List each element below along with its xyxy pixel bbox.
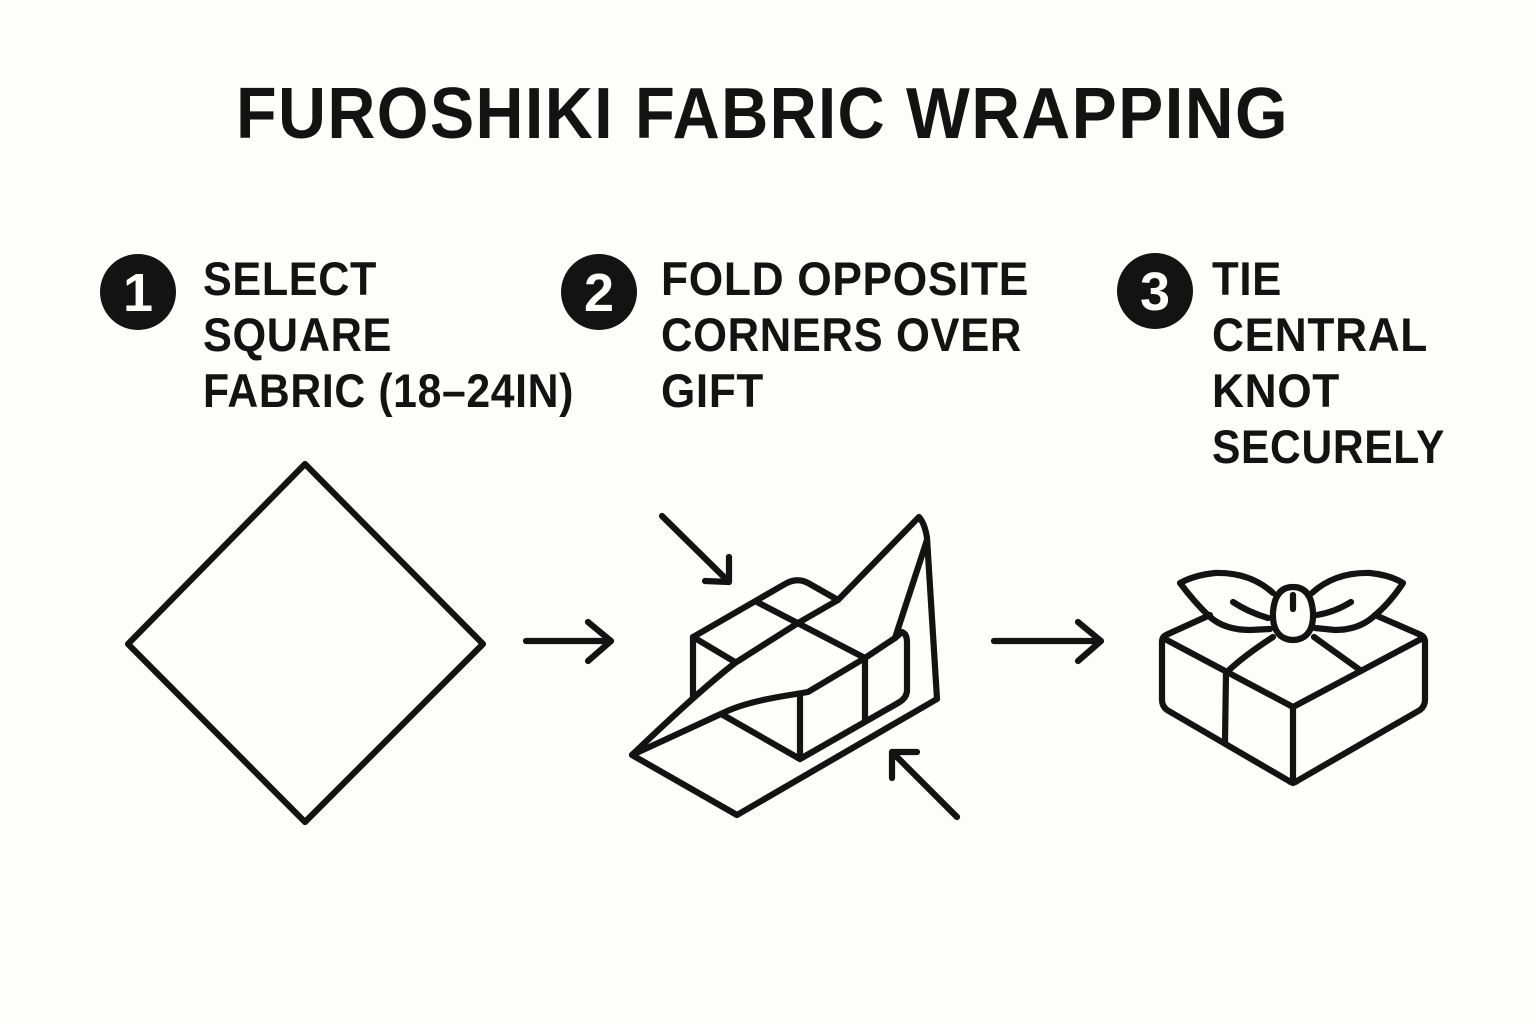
step 3 number badge: 3 [1140, 262, 1170, 322]
step 3 heading [1117, 252, 1445, 473]
arrow: step 1 to step 2 [526, 622, 611, 661]
step 3 number badge [1117, 253, 1193, 329]
step 3 text: TIE [1212, 252, 1282, 305]
title [236, 73, 1289, 154]
step 2 heading [561, 252, 1029, 417]
step 1 text: FABRIC (18–24IN) [203, 364, 574, 417]
step 2 text: CORNERS OVER [661, 308, 1022, 361]
step 1 heading [100, 252, 574, 417]
title: WRAPPING [906, 73, 1289, 154]
icon: square fabric diamond [128, 464, 483, 822]
step 2 text [661, 252, 1029, 417]
arrow: step 2 to step 3 [994, 622, 1101, 661]
step 2 number badge: 2 [584, 263, 614, 323]
step 1 text: SQUARE [203, 308, 392, 361]
step 2 text: FOLD OPPOSITE [661, 252, 1029, 305]
step 3 text [1212, 252, 1445, 473]
right leaf of knot [1312, 573, 1403, 630]
icon: fabric folded over gift [632, 517, 937, 815]
step 3 text: SECURELY [1212, 420, 1445, 473]
left leaf of knot [1180, 573, 1273, 630]
central knot [1273, 587, 1313, 640]
step 1 text [203, 252, 574, 417]
step 2 text: GIFT [661, 364, 764, 417]
title: FUROSHIKI [236, 73, 614, 154]
step 1 number badge: 1 [123, 263, 153, 323]
icon: gift wrapped with central knot [1162, 573, 1425, 783]
step 1 number badge [100, 254, 176, 330]
step 2 number badge [561, 254, 637, 330]
step 1 text: SELECT [203, 252, 377, 305]
step 3 text: CENTRAL [1212, 308, 1428, 361]
arrow: fold in from bottom right [892, 752, 957, 817]
title: FABRIC [635, 73, 886, 154]
arrow: fold in from top left [662, 516, 729, 582]
step 3 text: KNOT [1212, 364, 1340, 417]
